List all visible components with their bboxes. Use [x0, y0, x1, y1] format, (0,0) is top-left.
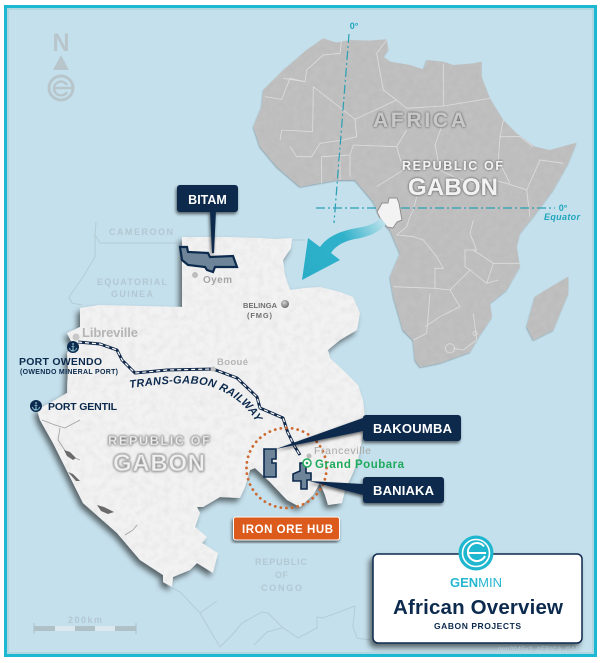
meridian and equator lines [316, 34, 555, 223]
Africa continent [253, 38, 577, 367]
latitude and longitude labels: 0° [350, 21, 359, 31]
title: African Overview [393, 596, 563, 619]
place: Belinga [243, 300, 289, 320]
latitude and longitude labels [350, 21, 580, 222]
place: Port Owendo [19, 341, 118, 376]
project area: Bitam [180, 247, 237, 272]
callout: Iron Ore Hub: IRON ORE HUB [242, 524, 333, 536]
Gabon map label: GABON [113, 450, 205, 477]
latitude and longitude labels: 0° [559, 203, 568, 213]
title panel [373, 536, 582, 643]
place: Port Owendo: (OWENDO MINERAL PORT) [20, 369, 118, 376]
place: Oyem [192, 272, 232, 286]
place: Franceville: Franceville [314, 445, 371, 457]
iron ore hub dotted circle [246, 428, 326, 508]
place: Belinga: BELINGA [243, 301, 278, 310]
callout: Iron Ore Hub [234, 517, 340, 540]
north arrow [49, 29, 73, 100]
place: Port Gentil: PORT GENTIL [48, 401, 118, 413]
place: Grand Poubara: Grand Poubara [315, 459, 405, 471]
drawing reference: gen0045v2_AFRICA_GAB [498, 646, 580, 653]
callout: Bakoumba [276, 415, 461, 449]
Trans-Gabon railway line [78, 342, 300, 455]
north arrow: N [52, 29, 70, 57]
neighbour labels: CONGO [261, 583, 302, 593]
place: Booue [210, 357, 248, 372]
callout: Baniaka: BANIAKA [373, 483, 435, 498]
Gabon map label: REPUBLIC OF [108, 433, 210, 448]
subtitle: GABON PROJECTS [434, 621, 521, 631]
scale bar [34, 615, 136, 634]
neighbour labels: GUINEA [111, 289, 154, 299]
Gabon highlight on Africa [377, 198, 402, 228]
icon: Genmin logo [458, 536, 494, 570]
project area: Bakoumba [264, 449, 276, 477]
place: Port Gentil: ⚓ [31, 401, 41, 411]
place: Booue: Booué [217, 357, 248, 368]
Africa labels: GABON [408, 174, 498, 201]
Gabon map label [108, 433, 210, 477]
place: Belinga: (FMG) [247, 311, 272, 320]
callout: Baniaka [309, 477, 444, 503]
coastal rivers [42, 420, 137, 535]
place: Oyem: Oyem [203, 275, 232, 286]
callout: Bitam [177, 185, 238, 253]
Genmin wordmark: GENMIN [450, 575, 502, 590]
place: Port Owendo: ⚓ [68, 342, 78, 352]
project area: Baniaka [293, 463, 311, 489]
neighbour labels: CAMEROON [109, 227, 173, 237]
neighbour labels: OF [275, 570, 288, 580]
neighbouring borders [69, 222, 370, 647]
callout: Bitam: BITAM [188, 193, 227, 207]
callout: Bakoumba: BAKOUMBA [373, 421, 453, 436]
railway label: TRANS-GABON RAILWAY [130, 376, 264, 420]
latitude and longitude labels: Equator [544, 212, 580, 222]
Gabon country map [37, 237, 365, 587]
place: Libreville: Libreville [82, 325, 138, 340]
neighbour labels [97, 227, 308, 593]
arrow: Africa to Gabon [302, 218, 386, 280]
Africa labels [373, 109, 503, 201]
neighbour labels: EQUATORIAL [97, 277, 168, 287]
place: Port Owendo: PORT OWENDO [19, 356, 102, 368]
coastal lagoons [64, 450, 114, 514]
Africa labels: AFRICA [373, 109, 466, 132]
Africa labels: REPUBLIC OF [402, 159, 503, 173]
neighbour labels: REPUBLIC [255, 557, 308, 567]
country borders [265, 40, 563, 353]
scale bar: 200km [68, 615, 102, 625]
